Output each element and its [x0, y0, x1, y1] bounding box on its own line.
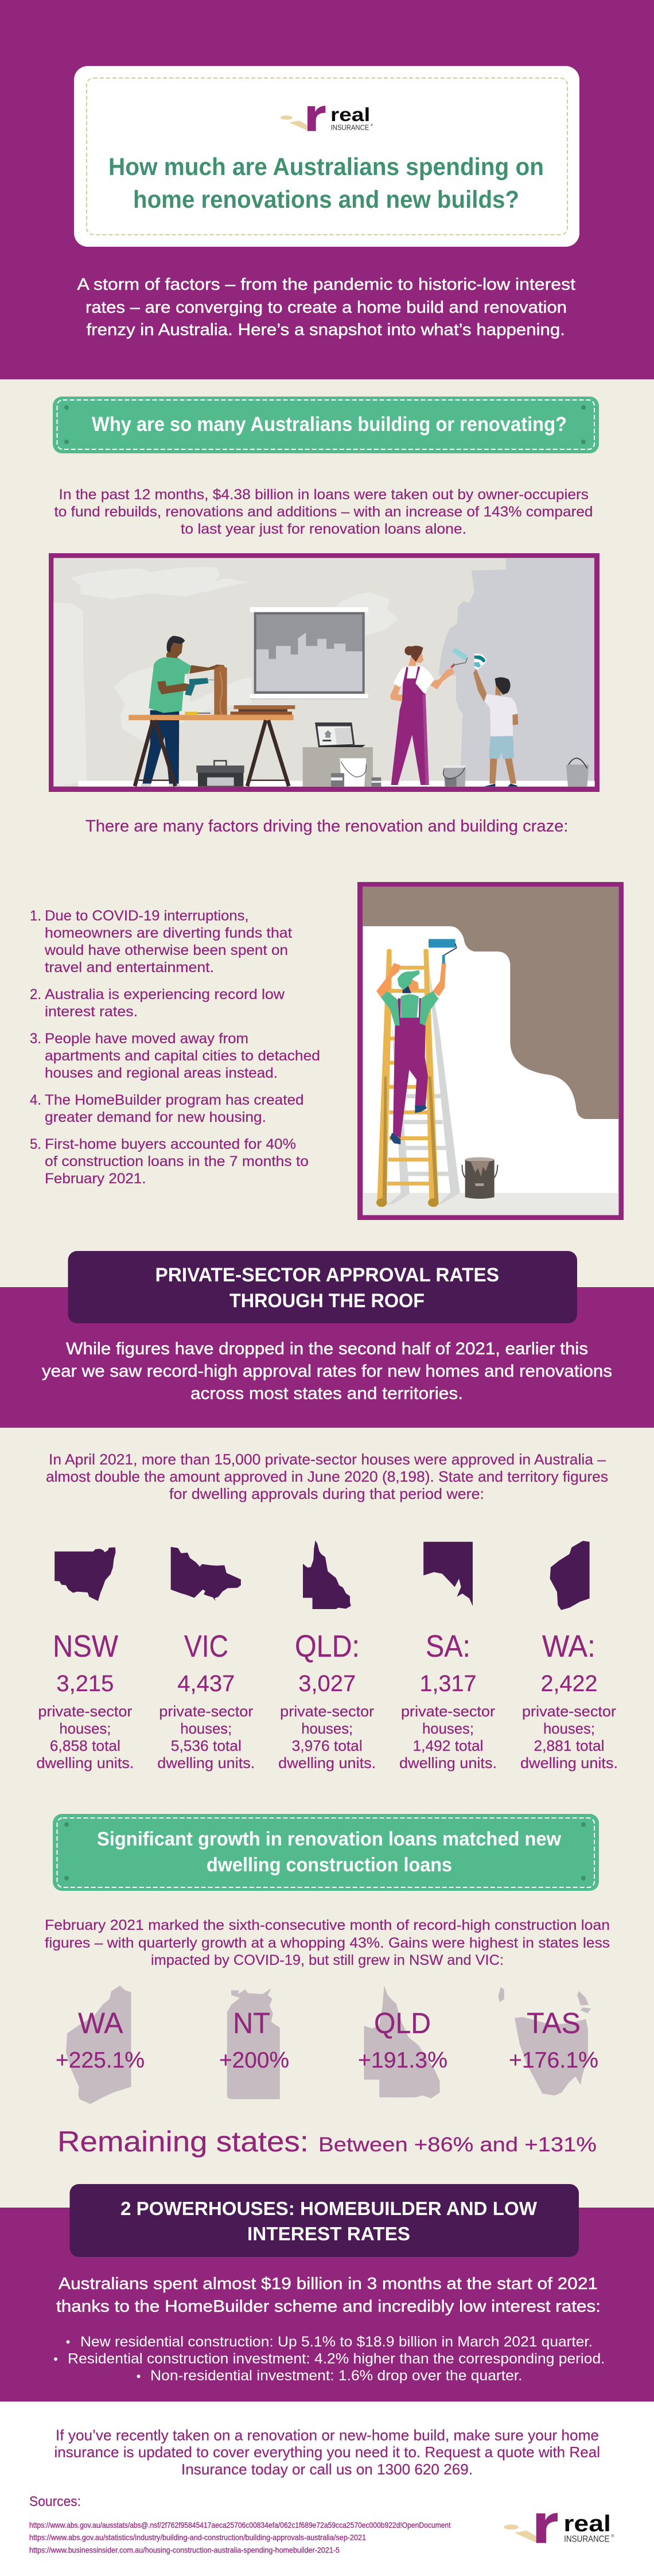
logo: Real Insurance footer: INSURANCE — [564, 2535, 610, 2544]
stat: SA — [399, 1542, 497, 1771]
map: QLD — [303, 1540, 351, 1609]
numbered list: factors: 3. — [30, 1031, 41, 1047]
stat: WA: 2,881 total — [534, 1737, 605, 1754]
laptop and box — [303, 722, 373, 787]
heading banner: renovation loan growth — [53, 1814, 599, 1891]
window — [250, 607, 368, 700]
text block: sources: https://www.abs.gov.au/ausstats/abs@.nsf/2f762f95845417aeca25706c00834efa/062c1f689e72a59cca2570ec000b922d!OpenDocument — [29, 2520, 451, 2530]
stat: SA: private-sector — [401, 1703, 495, 1720]
logo: Real Insurance: real — [330, 104, 370, 126]
stat: VIC: 5,536 total — [171, 1737, 242, 1754]
stat: WA: private-sector — [522, 1703, 616, 1720]
text block: approval summary — [42, 1339, 612, 1403]
text block: approval summary: While figures have dropped in the second half of 2021, earlier this — [66, 1339, 588, 1358]
stat: WA: houses; — [543, 1720, 595, 1737]
heading banner: 2 POWERHOUSES: HOMEBUILDER AND LOW — [120, 2198, 538, 2219]
stat: NT growth: NT — [233, 2007, 270, 2039]
stat: QLD growth — [358, 1986, 447, 2099]
title card — [74, 66, 579, 247]
text block: remaining states: Remaining states: — [57, 2126, 309, 2158]
paint roller — [429, 939, 457, 963]
numbered list: factors: Due to COVID-19 interruptions, — [45, 908, 249, 924]
heading banner: renovation loan growth: dwelling construction loans — [207, 1854, 452, 1876]
map: TAS faded — [498, 1987, 591, 2096]
stat: QLD: 3,027 — [298, 1671, 356, 1696]
stat: QLD growth: +191.3% — [358, 2048, 447, 2073]
text block: $19 billion summary: thanks to the HomeBuilder scheme and incredibly low interest rates: — [56, 2298, 601, 2316]
heading banner — [68, 1251, 577, 1323]
painted wall — [439, 558, 594, 782]
stat: NSW: NSW — [53, 1629, 118, 1664]
text block: call to action — [54, 2426, 600, 2478]
stat: NSW: private-sector — [38, 1703, 133, 1720]
bullet list: construction figures: Non-residential investment: 1.6% drop over the quarter. — [150, 2368, 522, 2384]
text block: remaining states: Between +86% and +131% — [318, 2134, 597, 2156]
painter — [376, 963, 446, 1144]
stat: QLD: dwelling units. — [278, 1754, 376, 1771]
logo: Real Insurance: INSURANCE — [331, 123, 369, 132]
text block: sources: https://www.abs.gov.au/statistics/industry/building-and-construction/building-approvals-australia/sep-2021 — [29, 2533, 366, 2542]
logo: Real Insurance footer: ® — [611, 2534, 614, 2539]
stat: QLD growth: QLD — [374, 2007, 431, 2039]
numbered list: factors: First-home buyers accounted for 40% — [45, 1136, 296, 1152]
workbench — [129, 665, 295, 786]
text block: construction loans: February 2021 marked the sixth-consecutive month of record-high construction loan — [45, 1917, 610, 1933]
stat: VIC: dwelling units. — [157, 1754, 255, 1771]
heading: main title: How much are Australians spending on — [108, 153, 544, 181]
map: NT faded — [227, 1988, 280, 2099]
stat: WA: 2,422 — [540, 1671, 598, 1696]
numbered list: factors: apartments and capital cities to detached — [45, 1048, 320, 1064]
numbered list: factors: would have otherwise been spent on — [44, 942, 288, 958]
stat: TAS growth — [498, 1987, 598, 2096]
stat: VIC — [157, 1547, 255, 1771]
map: WA — [550, 1541, 590, 1610]
stat: QLD: 3,976 total — [292, 1737, 363, 1754]
numbered list: factors: 4. — [30, 1092, 41, 1108]
bullet list: construction figures: Residential construction investment: 4.2% higher than the corresponding period. — [68, 2350, 605, 2367]
text block: construction loans: impacted by COVID-19, but still grew in NSW and VIC: — [151, 1952, 504, 1968]
numbered list: factors: Australia is experiencing record low — [45, 986, 285, 1003]
text block: approval summary: year we saw record-high approval rates for new homes and renovations — [42, 1362, 612, 1381]
stat: TAS growth: TAS — [527, 2007, 581, 2039]
stat: WA: dwelling units. — [520, 1754, 618, 1771]
text block: April 2021 approvals: almost double the amount approved in June 2020 (8,198). State and territory figures — [46, 1468, 608, 1485]
illustration: family renovating a room — [49, 553, 600, 792]
stat: SA: SA: — [426, 1629, 470, 1664]
text block: construction loans: figures – with quarterly growth at a whopping 43%. Gains were highest in states less — [45, 1935, 610, 1951]
paint tins — [331, 758, 589, 787]
numbered list: factors: The HomeBuilder program has created — [45, 1092, 304, 1108]
stat: VIC: VIC — [184, 1629, 228, 1664]
numbered list: factors: 1. — [30, 908, 41, 924]
stat: NSW: 6,858 total — [50, 1737, 120, 1754]
map: QLD faded — [364, 1986, 440, 2099]
text block: loans paragraph: to last year just for renovation loans alone. — [181, 521, 466, 537]
text block: sources — [29, 2494, 451, 2555]
text block: remaining states — [57, 2126, 597, 2158]
stat: WA growth: +225.1% — [56, 2048, 145, 2073]
text block: approval summary: across most states and territories. — [190, 1384, 463, 1403]
woman with roller — [390, 646, 468, 785]
logo: Real Insurance footer: real — [563, 2511, 611, 2536]
numbered list: factors: greater demand for new housing. — [45, 1109, 266, 1125]
stat: WA — [520, 1541, 618, 1771]
text block: loans paragraph: to fund rebuilds, renovations and additions – with an increase of 143% compared — [54, 504, 593, 520]
stat: QLD — [278, 1540, 376, 1771]
stat: QLD: houses; — [301, 1720, 353, 1737]
heading banner: why building or renovating — [53, 397, 599, 453]
heading banner: renovation loan growth: Significant growth in renovation loans matched new — [97, 1828, 562, 1850]
stat: SA: 1,317 — [420, 1671, 476, 1696]
heading banner: PRIVATE-SECTOR APPROVAL RATES — [155, 1264, 499, 1286]
text block: loans paragraph — [54, 487, 593, 537]
text block: loans paragraph: In the past 12 months, $4.38 billion in loans were taken out by owner-occupiers — [59, 487, 589, 503]
text block: $19 billion summary — [56, 2275, 601, 2316]
stat: QLD: QLD: — [295, 1629, 360, 1664]
numbered list: factors: interest rates. — [45, 1004, 138, 1020]
logo: Real Insurance: ® — [371, 123, 373, 127]
map: SA — [423, 1542, 473, 1606]
stat: NSW — [36, 1547, 134, 1771]
text block: intro: rates – are converging to create a home build and renovation — [85, 298, 567, 317]
text block: intro — [77, 275, 575, 339]
stat: VIC: 4,437 — [177, 1671, 235, 1696]
numbered list: factors: February 2021. — [45, 1171, 146, 1187]
numbered list: factors: houses and regional areas instead. — [45, 1065, 278, 1081]
toolbox — [196, 761, 244, 787]
text block: April 2021 approvals: for dwelling approvals during that period were: — [169, 1485, 484, 1502]
heading banner: INTEREST RATES — [247, 2223, 410, 2244]
text block: $19 billion summary: Australians spent almost $19 billion in 3 months at the start of 2021 — [59, 2275, 598, 2293]
numbered list: factors: 5. — [30, 1136, 41, 1152]
stat: WA growth: WA — [78, 2007, 123, 2039]
stat: NT growth — [219, 1988, 289, 2099]
text block: sources: https://www.businessinsider.com.au/housing-construction-australia-spending-homebuilder-2021-5 — [29, 2546, 340, 2555]
numbered list: factors: homeowners are diverting funds that — [45, 925, 292, 941]
stat: TAS growth: +176.1% — [509, 2048, 598, 2073]
paint can — [462, 1157, 497, 1199]
text block: April 2021 approvals — [46, 1451, 608, 1502]
text block: call to action: insurance is updated to cover everything you need it to. Request a quote with Real — [54, 2443, 600, 2461]
panel: footer — [0, 2402, 654, 2576]
stat: NSW: houses; — [59, 1720, 111, 1737]
logo: Real Insurance — [281, 104, 373, 132]
text block: construction loans — [45, 1917, 610, 1968]
text block: intro: A storm of factors – from the pandemic to historic-low interest — [77, 275, 575, 294]
numbered list: factors — [30, 908, 320, 1187]
text block: intro: frenzy in Australia. Here’s a snapshot into what’s happening. — [86, 321, 565, 339]
map: WA faded — [66, 1986, 131, 2104]
bullet list: construction figures: New residential construction: Up 5.1% to $18.9 billion in March 2021 quarter. — [80, 2334, 593, 2350]
bullet list: construction figures — [54, 2334, 605, 2384]
stat: QLD: private-sector — [280, 1703, 375, 1720]
illustration: painter on ladder — [357, 882, 624, 1220]
panel: 2 powerhouses — [0, 2184, 654, 2402]
heading banner — [70, 2184, 579, 2257]
text block: factors lead-in: There are many factors driving the renovation and building craze: — [85, 817, 568, 836]
text block: call to action: Insurance today or call us on 1300 620 269. — [181, 2461, 473, 2478]
ladder shadow — [387, 970, 460, 1205]
stat: WA: WA: — [542, 1629, 595, 1664]
heading banner: THROUGH THE ROOF — [229, 1290, 425, 1312]
man with drill — [141, 636, 225, 787]
boy with colour swatch — [473, 654, 518, 787]
heading banner: why building or renovating: Why are so many Australians building or renovating? — [92, 413, 567, 436]
numbered list: factors: travel and entertainment. — [45, 959, 214, 976]
numbered list: factors: 2. — [30, 986, 41, 1003]
numbered list: factors: People have moved away from — [45, 1031, 248, 1047]
heading: main title — [108, 153, 544, 213]
stat: NSW: 3,215 — [56, 1671, 114, 1696]
logo: Real Insurance footer — [504, 2511, 614, 2544]
numbered list: factors: of construction loans in the 7 months to — [45, 1153, 309, 1170]
map: VIC — [171, 1547, 241, 1601]
text block: sources: Sources: — [29, 2494, 81, 2509]
stat: WA growth — [56, 1986, 145, 2104]
stat: VIC: houses; — [180, 1720, 232, 1737]
panel: header band — [0, 0, 654, 379]
text block: April 2021 approvals: In April 2021, more than 15,000 private-sector houses were approved in Australia – — [49, 1451, 606, 1468]
text block: call to action: If you’ve recently taken on a renovation or new-home build, make sure your home — [56, 2426, 599, 2443]
stat: SA: 1,492 total — [413, 1737, 483, 1754]
stat: NSW: dwelling units. — [36, 1754, 134, 1771]
heading: main title: home renovations and new builds? — [133, 186, 519, 213]
stat: NT growth: +200% — [219, 2048, 289, 2073]
stat: SA: houses; — [422, 1720, 474, 1737]
panel: private-sector approval rates — [0, 1251, 654, 1428]
map: NSW — [54, 1547, 116, 1601]
stat: VIC: private-sector — [159, 1703, 254, 1720]
stat: SA: dwelling units. — [399, 1754, 497, 1771]
ladder — [376, 949, 439, 1207]
